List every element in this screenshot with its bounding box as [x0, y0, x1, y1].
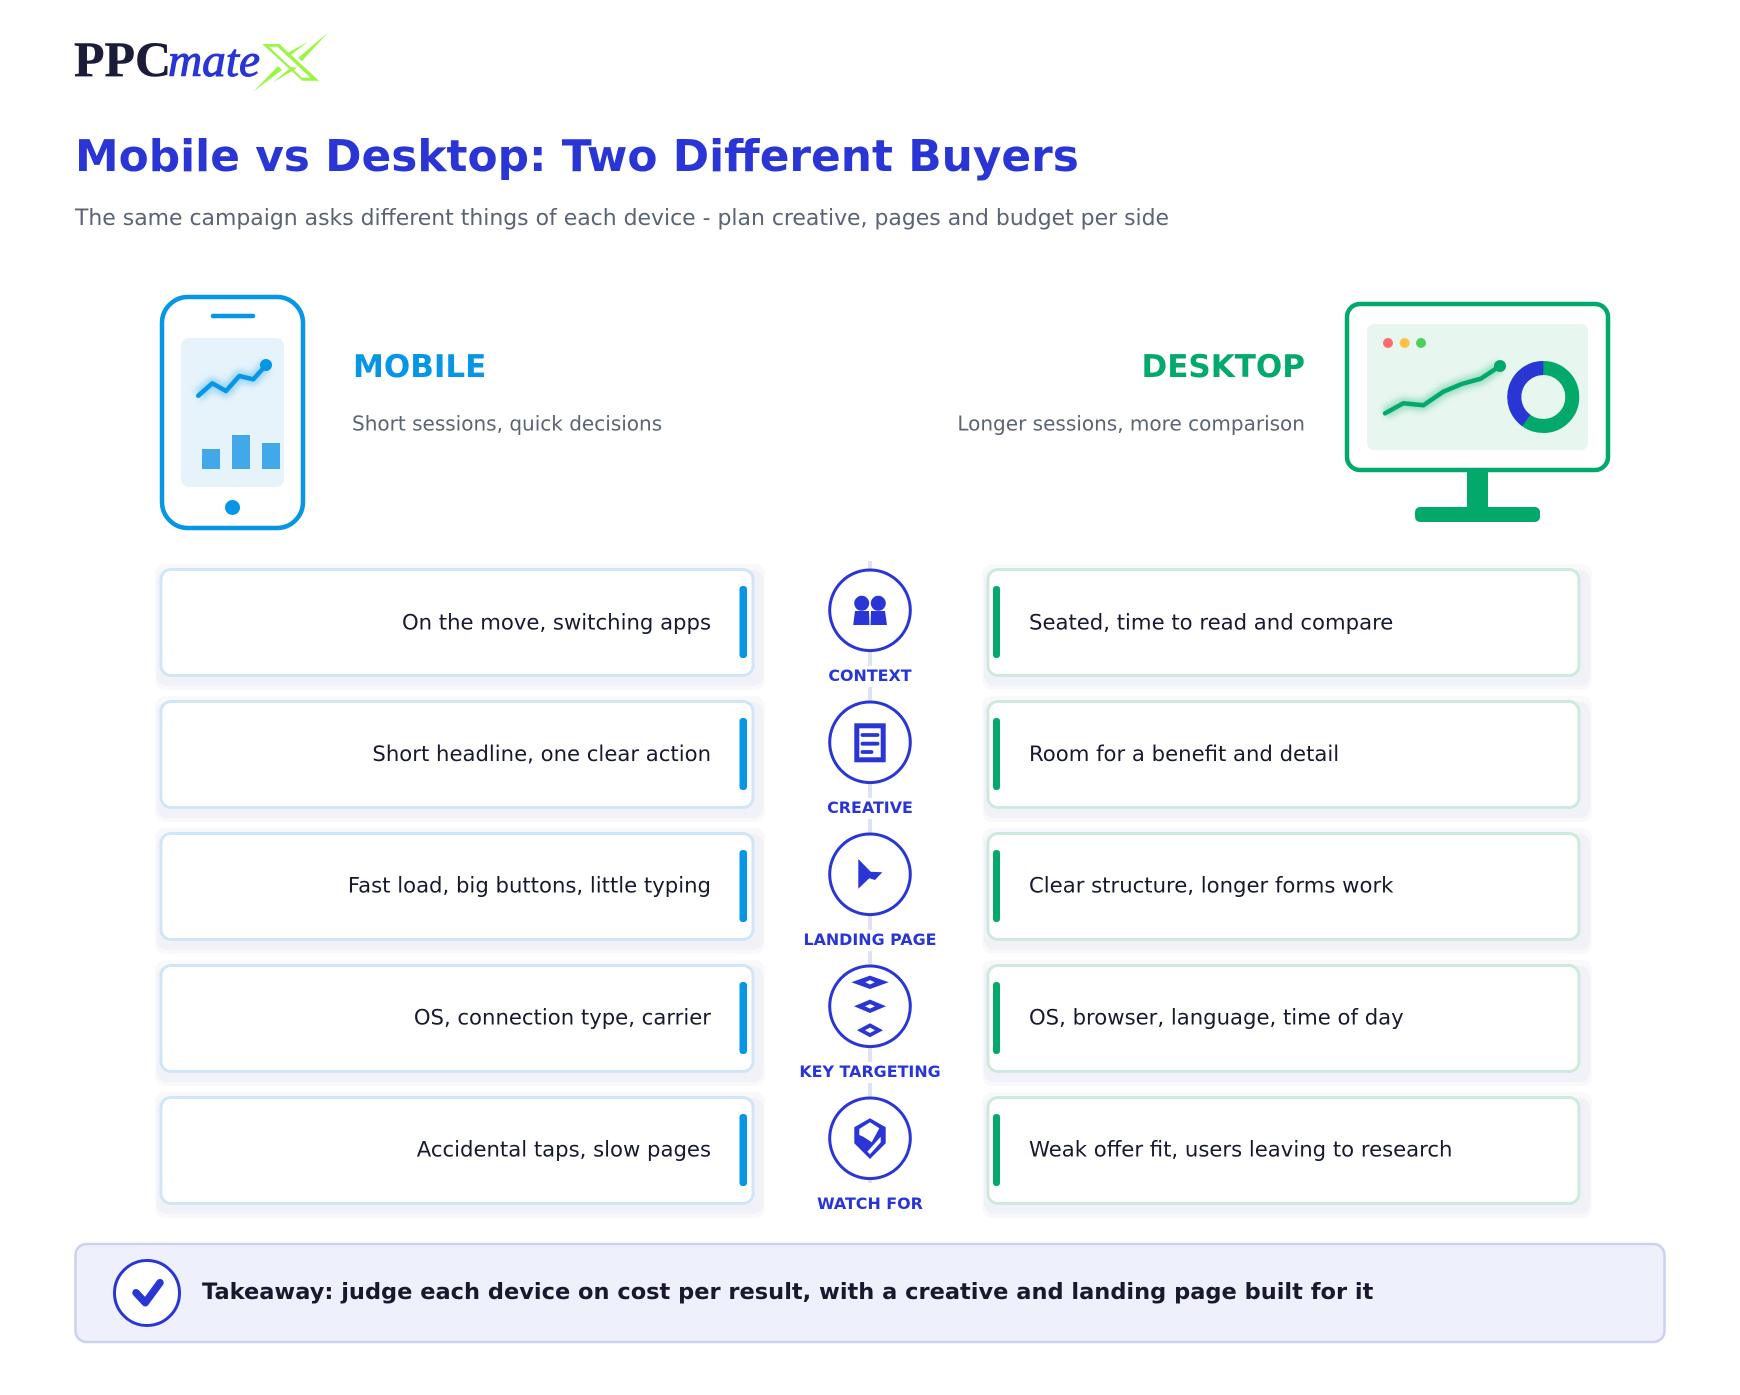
- desktop card: creative: Room for a benefit and detail: [1029, 741, 1339, 766]
- desktop card: key targeting: OS, browser, language, time of day: [1029, 1004, 1404, 1030]
- heading: desktop: DESKTOP: [1142, 349, 1305, 385]
- title: Mobile vs Desktop: Two Different Buyers: [75, 131, 1079, 182]
- row 2: creative: [155, 696, 1592, 822]
- mobile card: key targeting: [155, 960, 765, 1086]
- icon: desktop monitor with chart and donut: [1347, 304, 1608, 522]
- label: context: CONTEXT: [828, 666, 912, 685]
- desktop card: landing page: [982, 828, 1592, 954]
- takeaway banner: [76, 1244, 1664, 1342]
- row 3: landing page: [155, 828, 1592, 954]
- row 4: key targeting: [155, 960, 1592, 1086]
- icon: mobile phone with chart: [162, 297, 303, 528]
- mobile card: landing page: Fast load, big buttons, little typing: [348, 872, 711, 898]
- desktop card: key targeting: [982, 960, 1592, 1086]
- label: watch for: [800, 1194, 940, 1215]
- logo: PPCmate X: [74, 31, 328, 92]
- mobile card: landing page: [155, 828, 765, 954]
- row 1: context: [155, 564, 1592, 690]
- mobile card: watch for: [155, 1092, 765, 1218]
- mobile card: creative: [155, 696, 765, 822]
- mobile card: key targeting: OS, connection type, carrier: [414, 1004, 711, 1030]
- center spine line: [868, 561, 872, 1183]
- desktop card: context: [982, 564, 1592, 690]
- icon: document: [830, 702, 910, 783]
- icon: shield with check: [830, 1098, 910, 1179]
- icon: stacked layers: [830, 966, 910, 1047]
- heading: mobile: MOBILE: [353, 349, 486, 385]
- desktop card: context: Seated, time to read and compare: [1029, 610, 1393, 635]
- desktop card: watch for: Weak offer fit, users leaving to research: [1029, 1136, 1452, 1162]
- logo: PPCmate X: mate: [168, 35, 260, 87]
- desktop card: creative: [982, 696, 1592, 822]
- desktop card: landing page: Clear structure, longer forms work: [1029, 872, 1394, 898]
- label: watch for: WATCH FOR: [817, 1194, 923, 1213]
- takeaway text: Takeaway: judge each device on cost per result, with a creative and landing page built for it: [202, 1279, 1374, 1305]
- row 5: watch for: [155, 1092, 1592, 1218]
- logo: PPCmate X: PPC: [74, 31, 171, 87]
- icon: cursor arrow: [830, 834, 910, 915]
- mobile card: watch for: Accidental taps, slow pages: [417, 1136, 711, 1162]
- mobile card: context: On the move, switching apps: [402, 610, 711, 635]
- desktop card: watch for: [982, 1092, 1592, 1218]
- icon: check circle: [114, 1260, 180, 1326]
- subtitle: The same campaign asks different things of each device - plan creative, pages and budget per side: [74, 206, 1169, 231]
- icon: people: [830, 570, 910, 651]
- label: creative: CREATIVE: [827, 798, 913, 817]
- label: key targeting: KEY TARGETING: [799, 1062, 941, 1081]
- mobile card: context: [155, 564, 765, 690]
- mobile card: creative: Short headline, one clear action: [372, 741, 711, 766]
- text: desktop description: Longer sessions, more comparison: [957, 411, 1305, 435]
- text: mobile description: Short sessions, quick decisions: [352, 411, 662, 435]
- label: landing page: LANDING PAGE: [803, 930, 937, 949]
